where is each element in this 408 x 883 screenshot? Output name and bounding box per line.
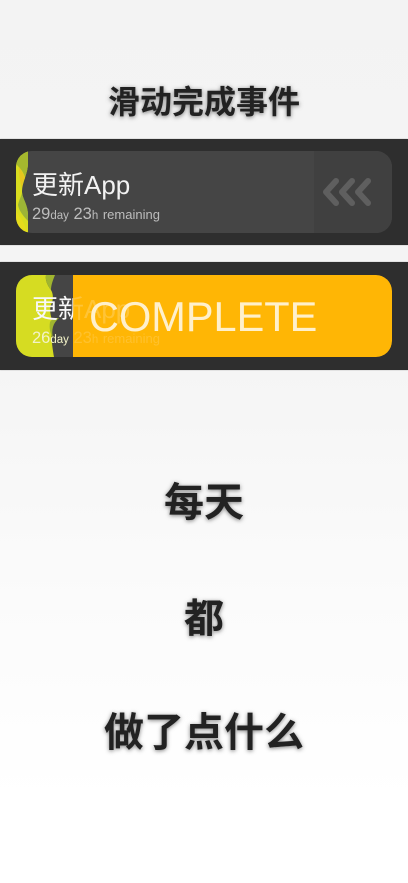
icon: triple chevron arrows: [323, 178, 371, 206]
task name: 更新App: [32, 294, 130, 324]
panel: swipe row idle: [0, 139, 408, 245]
panel: swipe row complete: [0, 262, 408, 370]
time remaining: 26day 23h remaining: [32, 329, 160, 347]
heading: did something: 做了点什么: [104, 711, 304, 755]
task card: [16, 151, 392, 233]
task card: [16, 275, 392, 357]
complete label: COMPLETE: [89, 293, 317, 340]
heading: every day: 每天: [164, 481, 244, 525]
icon: wavy colour strip: [16, 152, 28, 232]
complete overlay: [73, 275, 392, 357]
task name: 更新App: [32, 170, 130, 200]
title: 滑动完成事件: [108, 84, 300, 120]
icon: expanded wavy colour panel: [16, 275, 59, 357]
heading: all: 都: [184, 597, 224, 641]
chevron button: [314, 151, 392, 233]
time remaining: 29day 23h remaining: [32, 205, 160, 223]
